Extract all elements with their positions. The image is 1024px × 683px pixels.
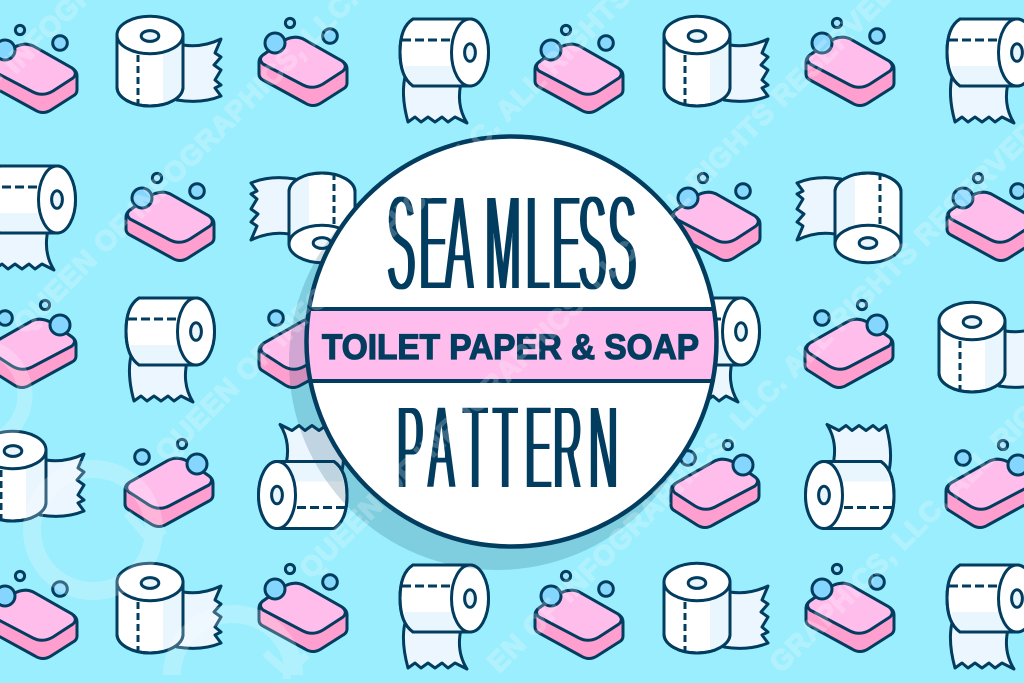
icon: soap row 1 — [535, 25, 623, 112]
subtitle: toilet paper and soap: TOILET PAPER & SOAP — [322, 328, 699, 367]
icon: rotated hanging roll row 4 — [258, 424, 347, 528]
icon: rotated roll row 2 — [251, 173, 355, 263]
badge circle — [306, 136, 716, 546]
pink band — [300, 309, 724, 381]
icon: paper roll row 4 — [0, 431, 84, 521]
badge outline — [306, 136, 716, 546]
icon: hanging roll row 5 — [947, 565, 1024, 669]
icon: hanging roll row 3 — [671, 298, 760, 402]
icon: hanging roll row 5 — [400, 565, 488, 669]
icon: paper roll row 1 — [664, 16, 768, 106]
icon: soap row 5 — [535, 571, 623, 658]
icon: mirrored soap row 4 — [946, 440, 1024, 528]
heading: seamless: SEAMLESS — [387, 166, 636, 320]
icon: soap row 5 — [806, 564, 894, 652]
icon: hanging roll row 1 — [947, 19, 1024, 123]
icon: rotated roll row 2 — [797, 173, 901, 263]
icon: mirrored soap row 4 — [125, 439, 213, 526]
icon: rotated hanging roll row 4 — [806, 424, 894, 528]
icon: mirrored soap row 3 — [805, 300, 893, 388]
icon: soap row 2 — [672, 173, 760, 260]
icon: mirrored soap row 3 — [0, 300, 76, 388]
circle badge drop shadow — [289, 154, 705, 570]
icon: soap row 2 — [947, 173, 1024, 260]
icon: paper roll row 3 — [939, 302, 1024, 392]
icon: soap row 2 — [126, 173, 214, 260]
icon: hanging roll row 3 — [126, 298, 214, 402]
icon: soap row 1 — [0, 25, 77, 112]
icon: hanging roll row 1 — [400, 19, 488, 123]
icon: soap row 5 — [0, 571, 77, 658]
icon: mirrored soap row 4 — [671, 440, 759, 528]
icon: mirrored soap row 3 — [259, 300, 347, 388]
icon: paper roll row 5 — [664, 563, 768, 653]
icon: paper roll row 1 — [117, 16, 221, 106]
icon: soap row 5 — [259, 564, 347, 652]
icon: soap row 1 — [259, 18, 347, 105]
title badge — [300, 136, 724, 546]
icon: soap row 1 — [806, 18, 894, 105]
icon: hanging roll row 2 — [0, 166, 76, 270]
heading: pattern: PATTERN — [397, 380, 618, 516]
icon: paper roll row 5 — [117, 563, 221, 653]
